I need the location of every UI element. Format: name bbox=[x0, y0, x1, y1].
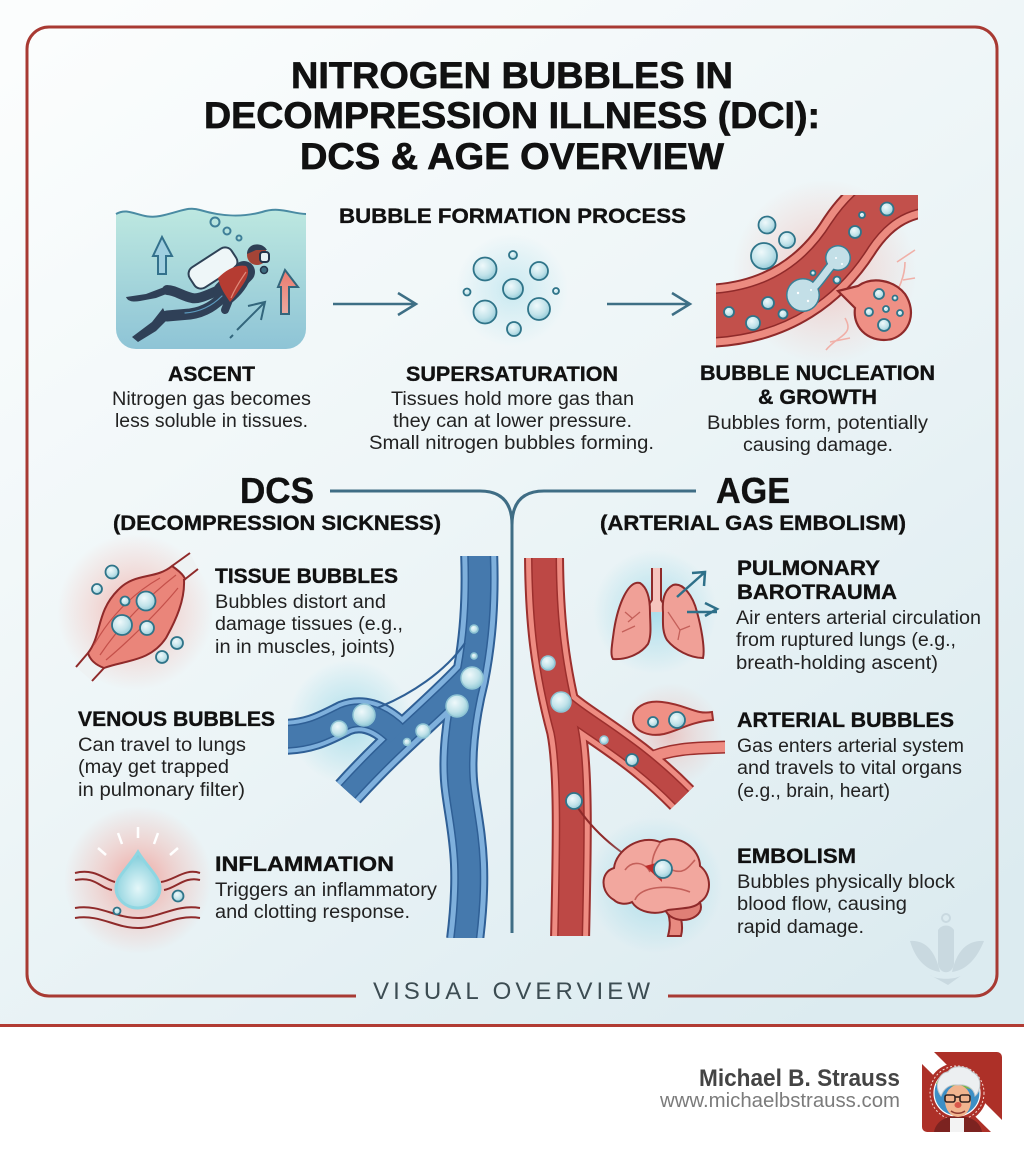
logo: caricature badge bbox=[920, 1050, 1004, 1134]
arrow: supersaturation to nucleation bbox=[607, 293, 690, 315]
item: pulmonary barotrauma: PULMONARY bbox=[737, 557, 880, 580]
item: inflammation: Triggers an inflammatory bbox=[215, 880, 438, 901]
item: inflammation bbox=[64, 806, 438, 954]
item: venous bubbles: in pulmonary filter) bbox=[78, 780, 245, 801]
title: DECOMPRESSION ILLNESS (DCI): bbox=[204, 95, 820, 136]
step: ascent: ASCENT bbox=[168, 363, 255, 386]
heading: AGE: AGE bbox=[716, 470, 790, 511]
item: embolism: Bubbles physically block bbox=[737, 872, 956, 893]
item: pulmonary barotrauma: BAROTRAUMA bbox=[737, 581, 897, 604]
heading: AGE bbox=[600, 470, 906, 535]
footer: author credit: www.michaelbstrauss.com bbox=[659, 1090, 900, 1112]
heading: DCS: (DECOMPRESSION SICKNESS) bbox=[113, 512, 441, 535]
icon: vessel with bubble nucleation bbox=[716, 195, 918, 350]
nucleating bubble bbox=[786, 245, 851, 312]
item: arterial bubbles: and travels to vital organs bbox=[737, 758, 962, 779]
step: supersaturation bbox=[369, 363, 654, 454]
footer band bbox=[0, 1025, 1024, 1154]
item: embolism: rapid damage. bbox=[737, 917, 864, 938]
item: embolism: blood flow, causing bbox=[737, 894, 907, 915]
heading: AGE: (ARTERIAL GAS EMBOLISM) bbox=[600, 512, 906, 535]
footer rule bbox=[0, 1024, 1024, 1027]
footer: author credit: Michael B. Strauss bbox=[699, 1065, 900, 1092]
step: ascent: Nitrogen gas becomes bbox=[112, 389, 311, 410]
item: inflammation: and clotting response. bbox=[215, 902, 410, 923]
footer: author credit bbox=[659, 1065, 900, 1112]
step: ascent: less soluble in tissues. bbox=[115, 411, 308, 432]
watermark: lotus bbox=[910, 914, 984, 985]
item: embolism bbox=[587, 817, 956, 953]
heading: DCS: DCS bbox=[240, 470, 314, 511]
step: supersaturation: SUPERSATURATION bbox=[406, 363, 618, 386]
title bbox=[204, 55, 820, 177]
step: bubble nucleation and growth: Bubbles form, potentially bbox=[707, 413, 929, 434]
step: bubble nucleation and growth: causing damage. bbox=[743, 435, 893, 456]
item: tissue bubbles bbox=[57, 534, 403, 690]
item: embolism: EMBOLISM bbox=[737, 845, 856, 868]
item: arterial bubbles: Gas enters arterial system bbox=[737, 736, 964, 757]
illustration: vein with branches and bubbles bbox=[280, 550, 483, 940]
step: bubble nucleation and growth bbox=[700, 362, 935, 456]
step: supersaturation: they can at lower pressure. bbox=[393, 411, 632, 432]
illustration: artery with branches and bubbles bbox=[541, 550, 730, 940]
item: pulmonary barotrauma: from ruptured lungs (e.g., bbox=[736, 630, 956, 651]
divider: branching connector bbox=[330, 491, 696, 933]
item: venous bubbles: (may get trapped bbox=[78, 757, 229, 778]
step: bubble nucleation and growth: BUBBLE NUCLEATION bbox=[700, 362, 935, 385]
title: DCS & AGE OVERVIEW bbox=[300, 136, 724, 177]
item: tissue bubbles: TISSUE BUBBLES bbox=[215, 565, 398, 588]
heading: bubble formation process: BUBBLE FORMATION PROCESS bbox=[339, 205, 686, 228]
item: arterial bubbles: (e.g., brain, heart) bbox=[737, 781, 890, 802]
label: visual overview: VISUAL OVERVIEW bbox=[373, 978, 650, 1005]
item: arterial bubbles bbox=[737, 709, 964, 802]
item: venous bubbles: VENOUS BUBBLES bbox=[78, 708, 275, 731]
step: supersaturation: Tissues hold more gas than bbox=[391, 389, 634, 410]
step: bubble nucleation and growth: & GROWTH bbox=[758, 386, 877, 409]
item: venous bubbles bbox=[78, 708, 275, 801]
step: supersaturation: Small nitrogen bubbles forming. bbox=[369, 433, 654, 454]
item: inflammation: INFLAMMATION bbox=[215, 853, 394, 876]
arrow: ascent to supersaturation bbox=[333, 293, 416, 315]
title: NITROGEN BUBBLES IN bbox=[291, 55, 733, 96]
item: venous bubbles: Can travel to lungs bbox=[78, 735, 246, 756]
item: tissue bubbles: in in muscles, joints) bbox=[215, 637, 395, 658]
icon: diver ascending in water bbox=[116, 209, 306, 349]
item: arterial bubbles: ARTERIAL BUBBLES bbox=[737, 709, 954, 732]
icon: bubble cluster bbox=[456, 234, 568, 346]
item: tissue bubbles: damage tissues (e.g., bbox=[215, 614, 403, 635]
item: tissue bubbles: Bubbles distort and bbox=[215, 592, 386, 613]
heading: DCS bbox=[113, 470, 441, 535]
item: pulmonary barotrauma bbox=[593, 550, 981, 674]
item: pulmonary barotrauma: breath-holding ascent) bbox=[736, 653, 938, 674]
frame bbox=[27, 27, 997, 996]
step: ascent bbox=[112, 363, 311, 432]
item: pulmonary barotrauma: Air enters arterial circulation bbox=[736, 608, 981, 629]
